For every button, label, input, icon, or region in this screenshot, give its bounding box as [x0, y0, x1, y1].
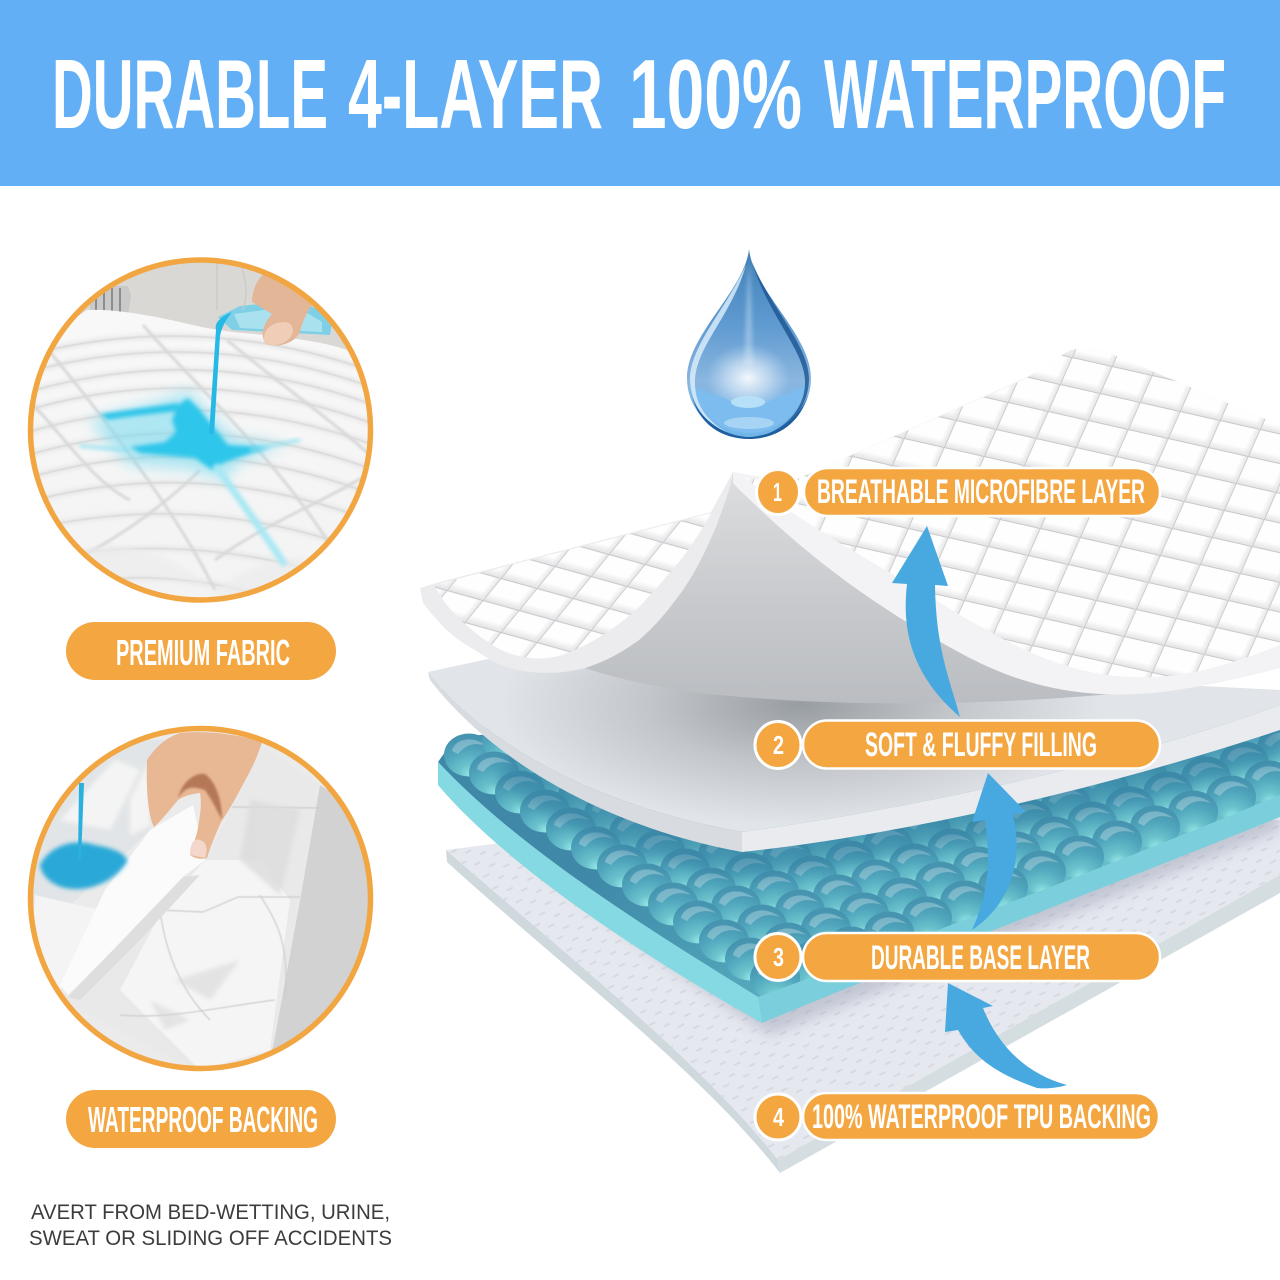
blue spot and stream — [40, 842, 127, 889]
caption: SWEAT OR SLIDING OFF ACCIDENTS — [29, 1227, 392, 1250]
photo circle: waterproof backing being lifted — [28, 727, 374, 1073]
label 2: soft and fluffy filling: 2 — [773, 730, 784, 760]
layer 2: soft filling — [428, 652, 1280, 852]
pill: waterproof backing: WATERPROOF BACKING — [88, 1099, 318, 1140]
header banner — [0, 0, 1280, 186]
label 1: breathable microfibre layer: 1 — [773, 477, 782, 507]
label 4: 100% waterproof TPU backing: 4 — [773, 1102, 784, 1132]
label 3: durable base layer — [755, 933, 1160, 981]
arrow: 2 to 1 — [892, 526, 960, 717]
arrow: 4 to 3 — [945, 983, 1067, 1088]
layer 4: TPU backing — [446, 800, 1280, 1173]
caption — [29, 1201, 392, 1250]
underside of the curled sheet — [585, 472, 1133, 703]
title: 100% — [629, 39, 802, 149]
arrow: 3 to 2 — [972, 773, 1026, 930]
label 2: soft and fluffy filling: SOFT & FLUFFY FILLING — [865, 726, 1097, 764]
title — [52, 39, 1226, 149]
pill: waterproof backing — [66, 1090, 336, 1148]
hand — [147, 732, 262, 859]
title: 4-LAYER — [348, 39, 603, 149]
title: DURABLE — [52, 39, 328, 149]
icon: water drop — [687, 249, 811, 439]
pill: premium fabric: PREMIUM FABRIC — [116, 632, 290, 673]
label 2: soft and fluffy filling — [755, 720, 1160, 768]
layer 3: gel bead base layer — [438, 700, 1280, 1023]
label 1: breathable microfibre layer — [756, 468, 1160, 516]
label 4: 100% waterproof TPU backing — [755, 1093, 1159, 1140]
left curled section — [420, 472, 733, 673]
label 3: durable base layer: 3 — [773, 942, 784, 972]
photo circle: liquid poured on quilted fabric — [28, 257, 374, 603]
caption: AVERT FROM BED-WETTING, URINE, — [31, 1201, 390, 1224]
hand — [252, 275, 312, 346]
glass and pouring liquid — [218, 304, 332, 335]
pill: premium fabric — [66, 622, 336, 680]
fold strip — [60, 805, 205, 995]
layer 1: breathable microfibre sheet — [420, 347, 1280, 703]
stain — [90, 390, 285, 480]
label 3: durable base layer: DURABLE BASE LAYER — [871, 939, 1090, 977]
right quilted section — [733, 347, 1280, 694]
